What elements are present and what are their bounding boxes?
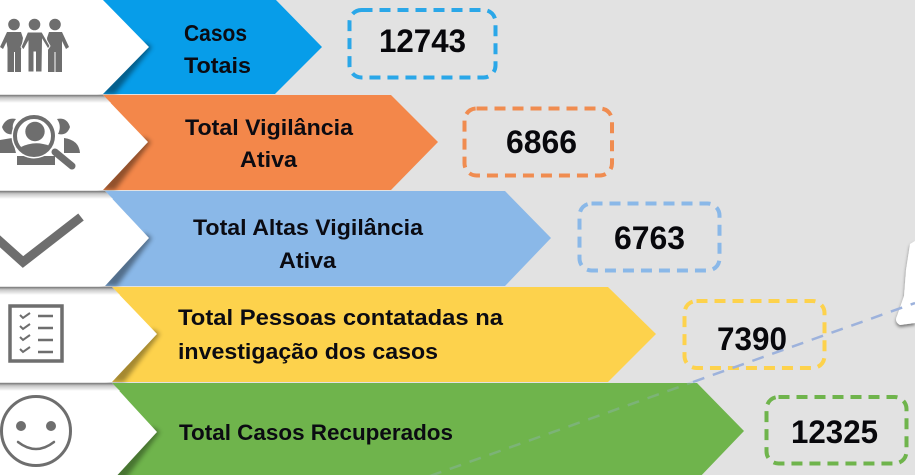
row: casos totais xyxy=(0,0,496,94)
white chevron: pessoas contatadas xyxy=(0,287,157,382)
value box: casos recuperados xyxy=(766,397,906,464)
row: pessoas contatadas xyxy=(0,287,824,382)
row: vigilancia ativa xyxy=(0,95,612,190)
value box: altas vigilancia: 6763 xyxy=(614,220,685,256)
row: pessoas contatadas: investigação dos casos xyxy=(178,339,438,364)
label: altas vigilancia: Total Altas Vigilância xyxy=(193,215,424,240)
icon: magnifier with people xyxy=(0,114,80,166)
label: casos totais: Casos xyxy=(184,20,247,46)
value box: pessoas contatadas: 7390 xyxy=(717,321,787,357)
row: altas vigilancia xyxy=(0,191,720,286)
arrow: casos totais xyxy=(100,0,322,94)
white chevron: casos totais xyxy=(0,0,149,94)
icon: people xyxy=(0,19,69,72)
arrow: vigilancia ativa xyxy=(100,95,438,190)
value box: pessoas contatadas xyxy=(684,301,824,368)
arrow: casos recuperados xyxy=(100,383,744,475)
value box: casos recuperados: 12325 xyxy=(791,414,878,450)
white chevron: vigilancia ativa xyxy=(0,95,148,190)
row: casos recuperados xyxy=(0,383,906,475)
white chevron: altas vigilancia xyxy=(0,191,149,286)
value box: vigilancia ativa xyxy=(464,108,612,176)
decorative map fragment xyxy=(896,241,915,325)
value box: vigilancia ativa: 6866 xyxy=(506,124,577,160)
row: casos totais: Totais xyxy=(184,53,251,78)
icon: check mark xyxy=(0,217,81,262)
row: vigilancia ativa: Ativa xyxy=(240,147,298,172)
value box: altas vigilancia xyxy=(580,204,720,270)
icon: checklist xyxy=(10,306,62,361)
row: altas vigilancia: Ativa xyxy=(279,248,337,273)
value box: casos totais: 12743 xyxy=(379,23,466,59)
white chevron: casos recuperados xyxy=(0,383,157,475)
icon: smiley xyxy=(2,396,70,466)
label: casos recuperados: Total Casos Recuperados xyxy=(179,420,453,445)
dashed connector line xyxy=(430,303,915,475)
arrow: altas vigilancia xyxy=(100,191,551,286)
arrow: pessoas contatadas xyxy=(100,287,656,382)
label: vigilancia ativa: Total Vigilância xyxy=(185,115,354,140)
label: pessoas contatadas: Total Pessoas contatadas na xyxy=(178,305,504,330)
value box: casos totais xyxy=(350,10,496,78)
